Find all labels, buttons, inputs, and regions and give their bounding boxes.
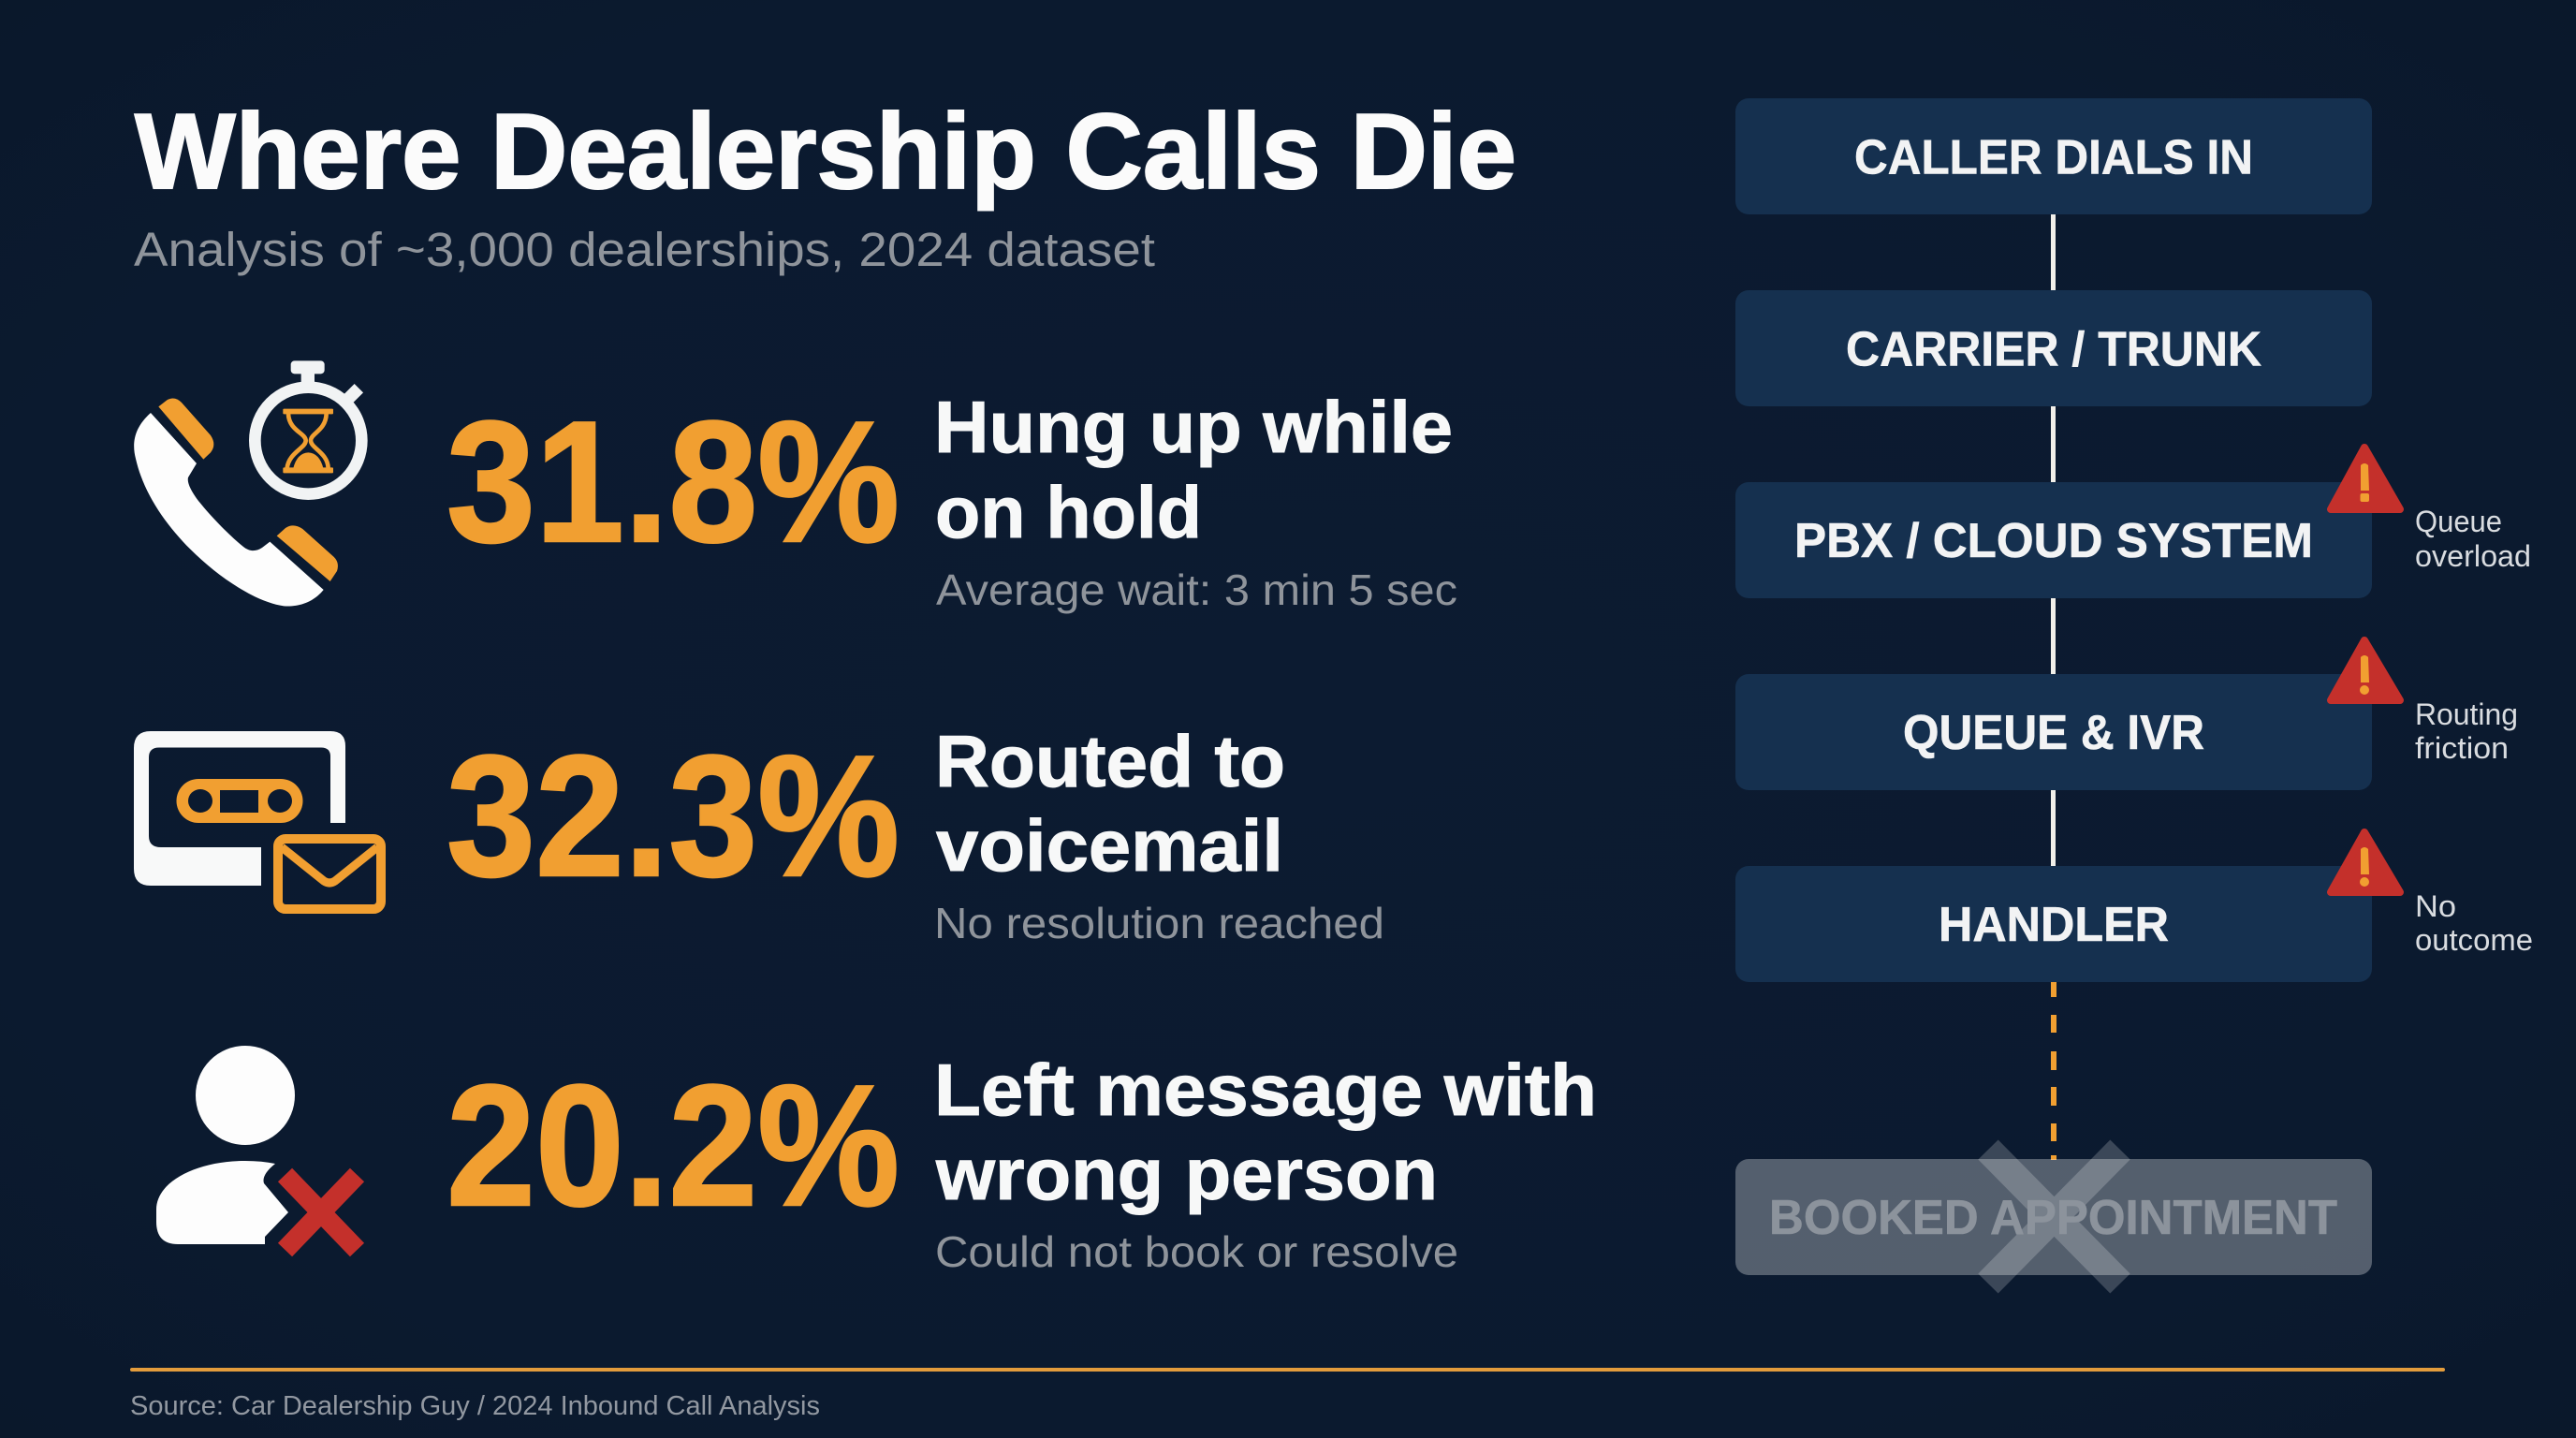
step: queue and ivr: [1735, 674, 2372, 790]
icon: phone with stopwatch: [134, 360, 361, 606]
warning: queue overload: [2331, 448, 2531, 573]
stat value: 32.3%: [446, 719, 900, 912]
step: handler: [1735, 866, 2372, 982]
stat label: [934, 1049, 1597, 1215]
warning: routing friction: Routing: [2415, 697, 2518, 731]
warning: no outcome: outcome: [2415, 923, 2533, 957]
stat note: Average wait: 3 min 5 sec: [936, 565, 1457, 614]
stat value: 31.8%: [446, 385, 900, 578]
stat row: left message with wrong person: [156, 1046, 1597, 1276]
warning: routing friction: friction: [2415, 731, 2509, 765]
step: carrier trunk: [1735, 290, 2372, 406]
step: handler: HANDLER: [1939, 898, 2169, 952]
step: booked appointment, crossed out: BOOKED APPOINTMENT: [1769, 1191, 2337, 1245]
subtitle: Analysis of ~3,000 dealerships, 2024 dataset: [134, 223, 1155, 276]
connector lines: [2051, 214, 2056, 867]
icon: voicemail tape with envelope: [134, 731, 381, 909]
cross over booked appointment: [1988, 1150, 2120, 1284]
stat value: 20.2%: [446, 1049, 900, 1241]
stat label: [934, 386, 1453, 553]
warning: routing friction: [2331, 640, 2518, 765]
title: Where Dealership Calls Die: [135, 93, 1516, 212]
step: caller dials in: CALLER DIALS IN: [1854, 131, 2253, 185]
stat label: Hung up while: [934, 386, 1453, 468]
stat label: wrong person: [935, 1133, 1438, 1215]
stat label: on hold: [935, 471, 1202, 553]
stat label: Left message with: [934, 1049, 1597, 1131]
warning: no outcome: [2331, 832, 2533, 957]
stat note: No resolution reached: [934, 899, 1384, 947]
warning: no outcome: No: [2415, 889, 2456, 923]
step: queue and ivr: QUEUE & IVR: [1903, 706, 2204, 760]
warning: queue overload: overload: [2415, 539, 2531, 573]
dashed connector to booked appointment: [2051, 982, 2056, 1160]
footer rule: [130, 1368, 2445, 1372]
flow diagram: call path: [1735, 98, 2533, 1284]
stat row: hung up on hold: [134, 360, 1457, 614]
step: pbx cloud system: PBX / CLOUD SYSTEM: [1794, 514, 2313, 568]
stat note: Could not book or resolve: [935, 1227, 1458, 1276]
stat label: Routed to: [935, 720, 1285, 802]
stat label: [935, 720, 1285, 887]
source note: Source: Car Dealership Guy / 2024 Inbound Call Analysis: [130, 1391, 820, 1421]
stat row: routed to voicemail: [134, 719, 1384, 947]
step: caller dials in: [1735, 98, 2372, 214]
stat label: voicemail: [936, 804, 1283, 887]
warning: queue overload: Queue: [2415, 505, 2502, 538]
step: carrier trunk: CARRIER / TRUNK: [1846, 322, 2261, 376]
icon: person with red cross: [156, 1046, 358, 1250]
step: booked appointment, crossed out: [1735, 1150, 2372, 1284]
step: pbx cloud system: [1735, 482, 2372, 598]
